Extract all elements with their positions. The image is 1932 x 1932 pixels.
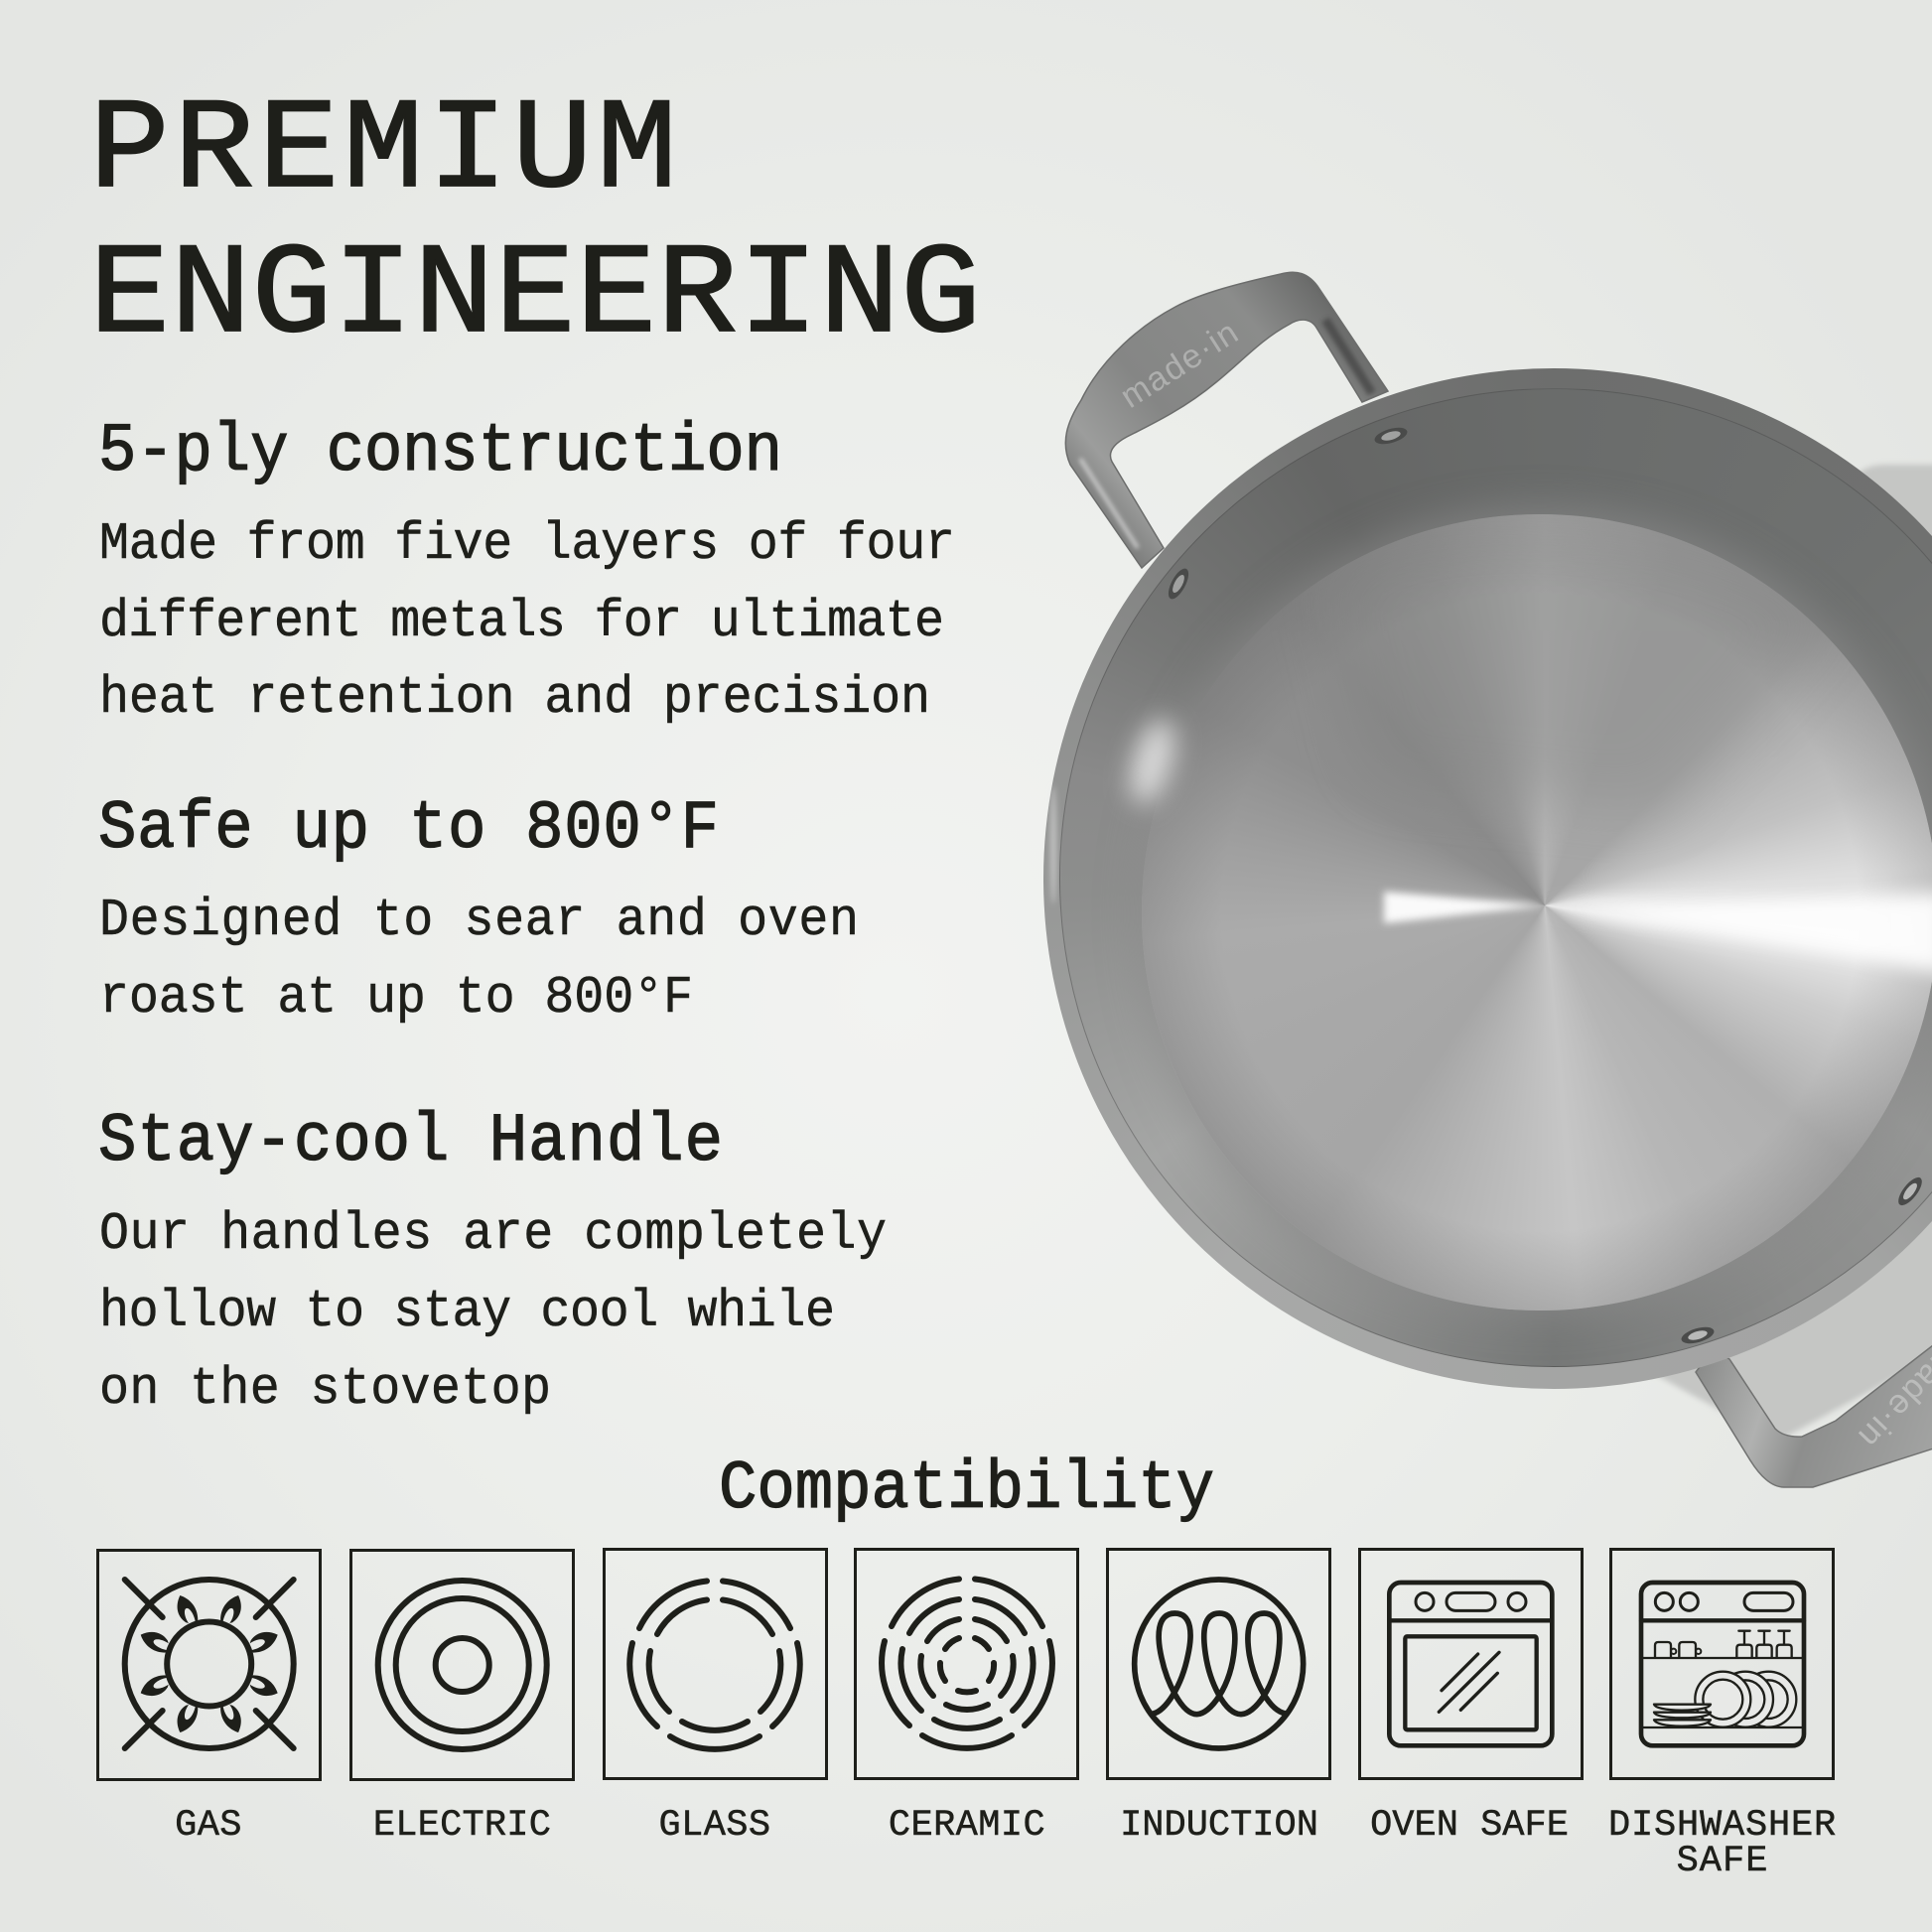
label: induction: INDUCTION	[1120, 1805, 1318, 1847]
section: 5-ply construction: different metals for ultimate	[99, 593, 944, 651]
section: 5-ply construction: 5-ply construction	[98, 413, 782, 490]
section: safe up to 800F	[98, 790, 859, 1028]
section: safe up to 800F: Designed to sear and oven	[99, 892, 859, 950]
icon: glass	[604, 1549, 826, 1779]
title	[89, 78, 981, 369]
label: dishwasher safe: SAFE	[1677, 1841, 1768, 1882]
section: 5-ply construction: Made from five layers of four	[99, 515, 955, 574]
label: electric: ELECTRIC	[373, 1805, 551, 1847]
icon: induction	[1108, 1549, 1330, 1779]
handle logo: made·in	[1114, 314, 1245, 416]
handle: bottom	[1696, 1334, 1932, 1487]
compatibility heading: Compatibility	[719, 1450, 1214, 1528]
section: safe up to 800F: Safe up to 800°F	[98, 790, 719, 868]
section: 5-ply construction: heat retention and precision	[99, 669, 930, 728]
section: stay-cool handle	[98, 1103, 887, 1419]
section: 5-ply construction	[98, 413, 955, 728]
rivets	[1165, 425, 1926, 1346]
label: oven safe: OVEN SAFE	[1370, 1805, 1569, 1847]
title: PREMIUM	[89, 78, 677, 224]
label: dishwasher safe	[1608, 1805, 1837, 1882]
label: ceramic: CERAMIC	[889, 1805, 1045, 1847]
icon: gas	[97, 1551, 320, 1779]
icon: dishwasher safe	[1610, 1549, 1833, 1779]
wall highlight	[1048, 427, 1922, 1344]
pan body	[1043, 368, 1932, 1389]
title: ENGINEERING	[89, 223, 981, 369]
section: stay-cool handle: hollow to stay cool while	[99, 1283, 835, 1341]
handle: top	[1065, 272, 1388, 568]
pan inner wall	[1059, 388, 1932, 1367]
label: glass: GLASS	[658, 1805, 771, 1847]
section: stay-cool handle: on the stovetop	[99, 1360, 551, 1419]
section: safe up to 800F: roast at up to 800°F	[99, 969, 693, 1028]
icon: oven safe	[1360, 1549, 1583, 1779]
icon: ceramic	[856, 1549, 1078, 1779]
icon: electric	[351, 1551, 574, 1779]
label: gas: GAS	[175, 1805, 242, 1847]
pan floor	[1142, 514, 1932, 1311]
section: stay-cool handle: Our handles are completely	[99, 1205, 887, 1264]
section: stay-cool handle: Stay-cool Handle	[98, 1103, 723, 1180]
label: dishwasher safe: DISHWASHER	[1608, 1805, 1837, 1847]
